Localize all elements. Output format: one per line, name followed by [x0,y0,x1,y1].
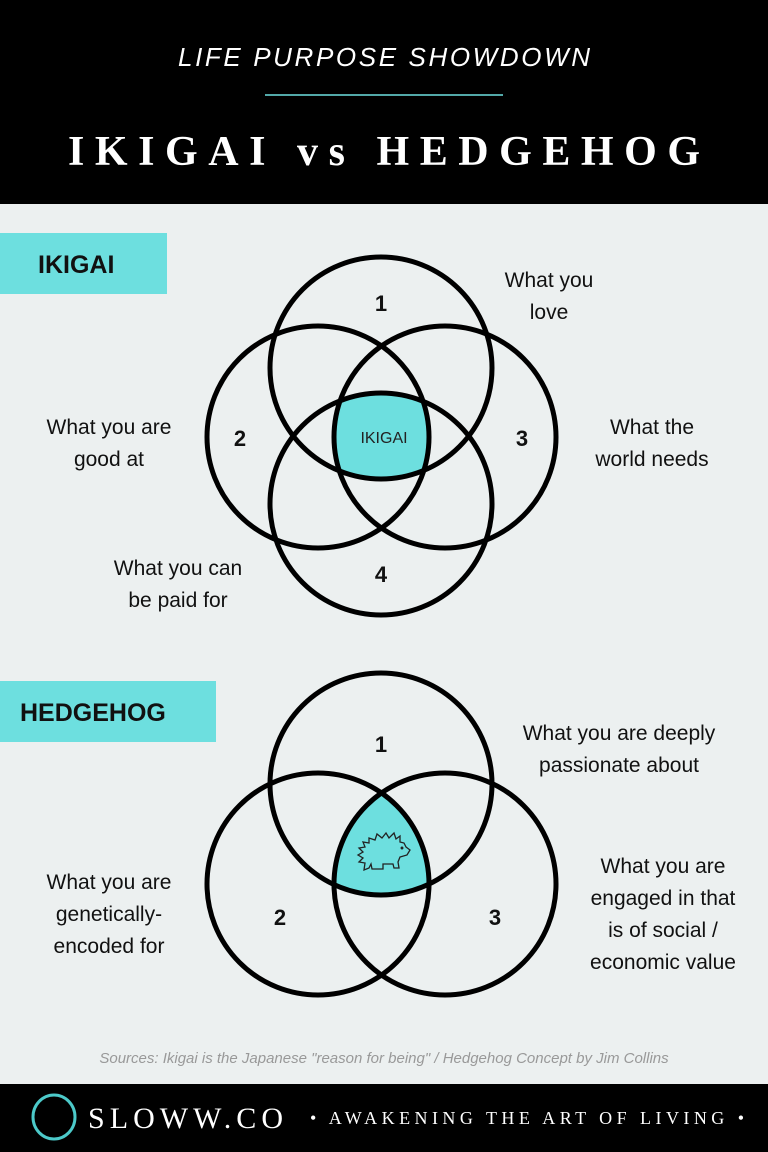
hedgehog labels: engaged in that [591,887,736,910]
ikigai labels: What you [505,269,593,292]
ikigai labels: What you are [47,416,171,439]
ikigai labels: be paid for [128,589,228,612]
hedgehog labels: genetically- [56,903,162,926]
hedgehog labels: is of social / [608,919,718,942]
ikigai labels: What you can [114,557,242,580]
ikigai venn diagram: 4 [375,562,388,587]
ikigai venn diagram: 3 [516,426,528,451]
hedgehog venn diagram: 2 [274,905,286,930]
ikigai labels: good at [74,448,144,471]
subtitle: LIFE PURPOSE SHOWDOWN [178,42,590,72]
hedgehog labels: economic value [590,951,736,974]
tab: ikigai [0,233,167,294]
ikigai labels [47,269,709,612]
hedgehog labels: passionate about [539,754,699,777]
icon: hedgehog [358,833,410,870]
icon: logo ring [33,1095,75,1139]
footer: • AWAKENING THE ART OF LIVING • [310,1108,744,1128]
hedgehog labels: encoded for [54,935,164,958]
tab: hedgehog [0,681,216,742]
ikigai venn diagram: 2 [234,426,246,451]
ikigai venn diagram: 1 [375,291,387,316]
footer: SLOWW.CO [88,1102,283,1135]
footer [0,1084,768,1152]
header [0,0,768,204]
hedgehog venn diagram: 1 [375,732,387,757]
hedgehog labels: What you are deeply [523,722,716,745]
tab: ikigai: IKIGAI [38,251,114,279]
hedgehog venn diagram: 3 [489,905,501,930]
tab: hedgehog: HEDGEHOG [20,699,166,727]
ikigai labels: love [530,301,568,324]
ikigai venn diagram [200,250,560,620]
title: IKIGAI vs HEDGEHOG [68,129,700,175]
ikigai labels: What the [610,416,694,439]
hedgehog labels: What you are [47,871,171,894]
sources: Sources: Ikigai is the Japanese "reason for being" / Hedgehog Concept by Jim Collins [99,1050,669,1067]
hedgehog labels [47,722,736,974]
ikigai venn diagram: IKIGAI [360,430,408,447]
hedgehog labels: What you are [601,855,725,878]
ikigai labels: world needs [594,448,709,471]
hedgehog venn diagram [200,660,560,1010]
